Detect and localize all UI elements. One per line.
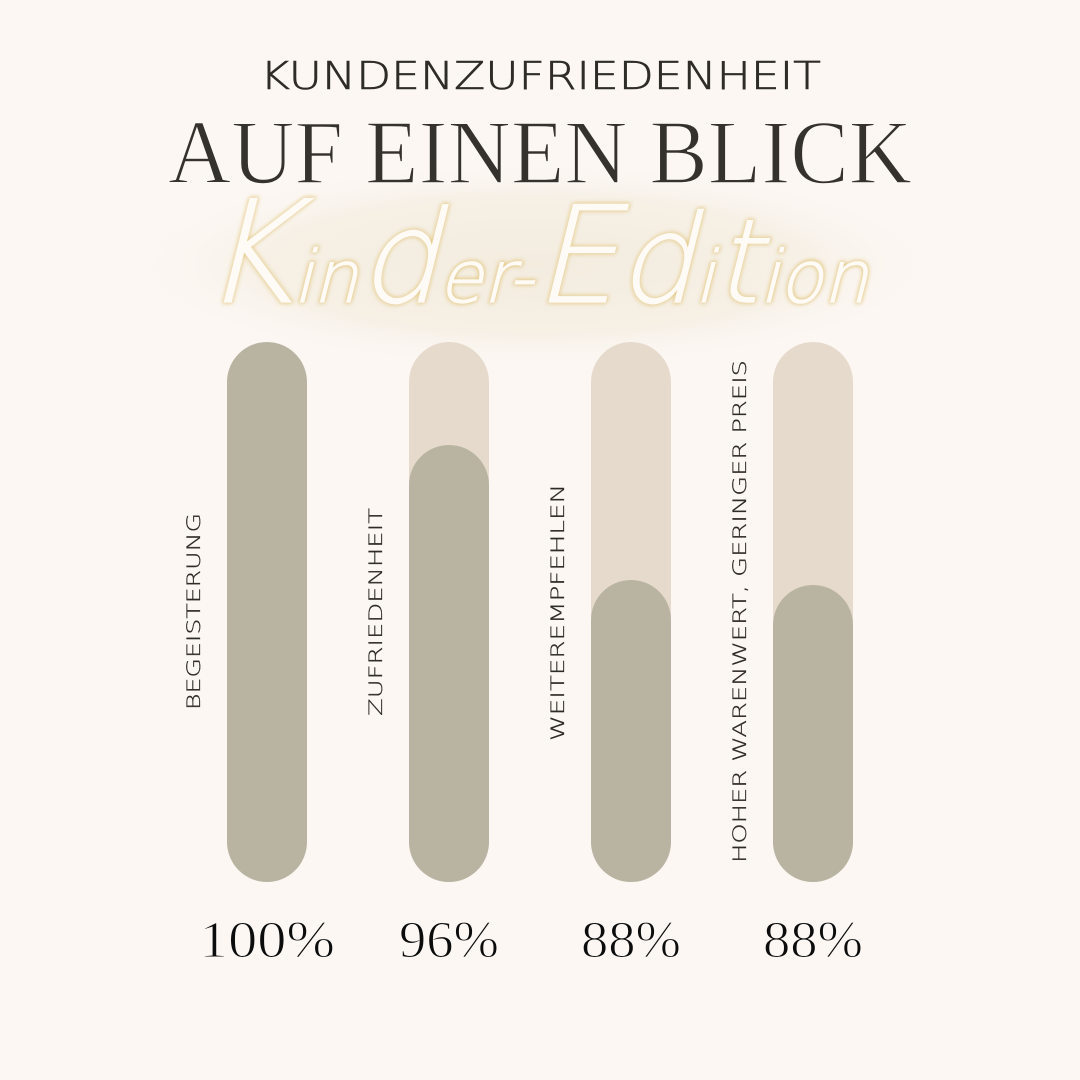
bar: Weiterempfehlen 88%: WEITEREMPFEHLEN (547, 484, 569, 741)
glowing script subtitle: Kinder-Edition: Kinder-Edition (191, 171, 901, 336)
bar: Hoher Warenwert, geringer Preis 88%: HOHER WARENWERT, GERINGER PREIS (729, 360, 751, 863)
bar: Zufriedenheit 96% (365, 342, 499, 969)
bar: Hoher Warenwert, geringer Preis 88% (729, 342, 863, 969)
bar: Weiterempfehlen 88%: 88% (581, 912, 681, 969)
bar: Weiterempfehlen 88% (547, 342, 681, 969)
bar: Hoher Warenwert, geringer Preis 88%: 88% (763, 912, 863, 969)
bar: Begeisterung 100% (183, 342, 335, 969)
bar: Zufriedenheit 96%: ZUFRIEDENHEIT (365, 507, 387, 716)
title: Auf einen Blick: AUF EINEN BLICK (168, 102, 912, 203)
bar chart (183, 342, 863, 969)
bar: Begeisterung 100%: BEGEISTERUNG (183, 513, 205, 710)
glowing script subtitle: Kinder-Edition (125, 160, 945, 370)
bar: Zufriedenheit 96%: 96% (399, 912, 499, 969)
glowing script subtitle: Kinder-Edition: Kinder-Edition (191, 171, 901, 336)
heading: Kundenzufriedenheit: KUNDENZUFRIEDENHEIT (260, 54, 821, 98)
bar: Begeisterung 100%: 100% (199, 912, 335, 969)
